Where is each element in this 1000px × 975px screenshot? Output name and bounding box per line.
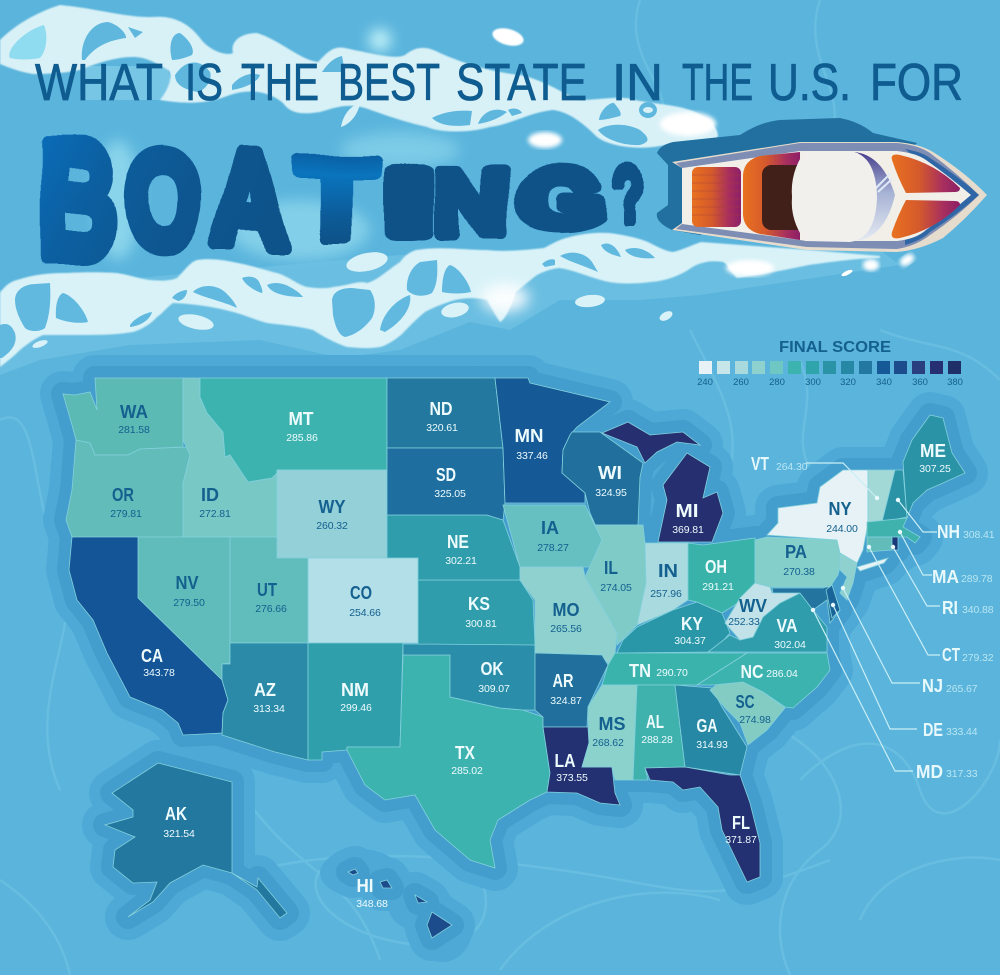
label: WV bbox=[728, 596, 767, 628]
label: ND: 320.61 bbox=[426, 422, 458, 434]
state: CA bbox=[69, 537, 228, 735]
label: MN: MN bbox=[514, 426, 544, 446]
foam wake: upper band bbox=[0, 5, 718, 148]
legend labels: 320 bbox=[840, 377, 856, 388]
label: ID bbox=[199, 485, 231, 520]
title word: BOATING?: T bbox=[298, 135, 376, 267]
label: ID: ID bbox=[201, 485, 219, 505]
state: IN bbox=[637, 543, 688, 625]
state: MN bbox=[495, 378, 610, 503]
label: AR: AR bbox=[552, 671, 574, 691]
foam wake: lower band bbox=[0, 233, 916, 367]
label: TX bbox=[451, 743, 483, 777]
label: OR: 279.81 bbox=[110, 508, 142, 520]
state: IA bbox=[503, 505, 602, 567]
label: AK: AK bbox=[165, 804, 187, 824]
label: AZ: AZ bbox=[254, 680, 276, 700]
legend labels: 260 bbox=[733, 377, 749, 388]
label: FL: FL bbox=[732, 813, 750, 833]
title word: BOATING? bbox=[40, 107, 643, 290]
label: CO bbox=[349, 583, 381, 619]
legend labels: 240 bbox=[697, 377, 713, 388]
label: MN bbox=[514, 426, 548, 462]
label: WI: WI bbox=[598, 463, 622, 483]
label: MS: 268.62 bbox=[592, 737, 624, 749]
state: SC bbox=[710, 682, 785, 745]
label: NY: NY bbox=[828, 499, 852, 519]
legend labels bbox=[697, 377, 963, 388]
label: NY: 244.00 bbox=[826, 523, 858, 535]
label: SC: 274.98 bbox=[739, 714, 771, 726]
label: UT bbox=[255, 580, 287, 615]
label: SD bbox=[434, 465, 466, 500]
callout: CT bbox=[867, 545, 994, 665]
label: TN: 290.70 bbox=[656, 667, 688, 679]
label: IA: IA bbox=[541, 518, 559, 538]
label: KY bbox=[674, 614, 706, 647]
label: ND: ND bbox=[430, 399, 452, 419]
label: GA: GA bbox=[696, 716, 718, 736]
state: FL bbox=[645, 767, 760, 882]
label: SD: SD bbox=[436, 465, 456, 485]
map halo inner bbox=[63, 378, 965, 938]
label: NM bbox=[340, 680, 372, 714]
callout: MD: 317.33 bbox=[946, 768, 978, 780]
callout: MA bbox=[898, 530, 993, 587]
label: AZ bbox=[253, 680, 285, 715]
state: AZ bbox=[222, 643, 308, 760]
label: FL bbox=[725, 813, 757, 846]
label: PA: 270.38 bbox=[783, 566, 815, 578]
label: WA: WA bbox=[120, 402, 148, 422]
label: OR bbox=[110, 485, 142, 520]
label: MO: 265.56 bbox=[550, 623, 582, 635]
state: WY bbox=[277, 470, 387, 558]
title line: IN bbox=[612, 54, 663, 112]
state: WV bbox=[725, 583, 800, 640]
title word: BOATING?: B bbox=[40, 107, 116, 290]
state: IL bbox=[585, 513, 646, 645]
legend swatches bbox=[699, 361, 961, 374]
label: MT: MT bbox=[288, 409, 314, 429]
label: AL: 288.28 bbox=[641, 734, 673, 746]
label: AL bbox=[641, 712, 673, 746]
title line: WHAT bbox=[35, 54, 163, 112]
label: MT: 285.86 bbox=[286, 432, 318, 444]
state: CO bbox=[308, 558, 418, 643]
legend labels: 380 bbox=[947, 377, 963, 388]
state: TN bbox=[602, 653, 747, 685]
state: WA bbox=[63, 378, 183, 455]
state: UT bbox=[230, 537, 308, 643]
label: NM: 299.46 bbox=[340, 702, 372, 714]
label: SD: 325.05 bbox=[434, 488, 466, 500]
state: HI Kauai bbox=[348, 869, 358, 875]
label: WY bbox=[316, 497, 348, 532]
state: OH bbox=[688, 538, 755, 613]
label: WA bbox=[118, 402, 150, 436]
callout: RI: RI bbox=[942, 598, 958, 618]
state: NV bbox=[138, 537, 230, 680]
label: PA bbox=[783, 542, 815, 578]
state: SD bbox=[387, 448, 505, 520]
state: MT bbox=[200, 378, 387, 482]
label: VA: 302.04 bbox=[774, 639, 806, 651]
label: SC bbox=[736, 692, 771, 726]
lighter water beneath lower foam bbox=[0, 250, 900, 375]
label: NV: NV bbox=[176, 573, 198, 593]
callout: DE: 333.44 bbox=[946, 726, 978, 738]
state: MO bbox=[520, 567, 617, 665]
label: CA: 343.78 bbox=[143, 667, 175, 679]
label: TX: 285.02 bbox=[451, 765, 483, 777]
label: NC: 286.04 bbox=[766, 668, 798, 680]
state: HI Maui bbox=[415, 895, 427, 903]
state: HI Oahu bbox=[380, 880, 392, 888]
state: NJ bbox=[840, 553, 857, 600]
callout: VT: 264.30 bbox=[776, 461, 808, 473]
label: ME bbox=[919, 441, 951, 475]
label: OH: 291.21 bbox=[702, 581, 734, 593]
callout: NJ: 265.67 bbox=[946, 683, 978, 695]
state: DE bbox=[826, 585, 840, 618]
title line: IS bbox=[185, 54, 223, 112]
state: Long Island bbox=[857, 558, 888, 571]
callout: MD bbox=[811, 608, 978, 782]
title word: BOATING?: ? bbox=[613, 152, 643, 240]
callout: MA: MA bbox=[932, 567, 959, 587]
label: AZ: 313.34 bbox=[253, 703, 285, 715]
label: MT bbox=[286, 409, 318, 444]
label: OK: OK bbox=[480, 659, 504, 679]
legend: final score bbox=[697, 339, 963, 388]
label: KY: KY bbox=[681, 614, 703, 634]
legend labels: 280 bbox=[769, 377, 785, 388]
label: IL bbox=[600, 558, 632, 594]
label: NY bbox=[826, 499, 858, 535]
label: KS: 300.81 bbox=[465, 618, 497, 630]
callout: RI: 340.88 bbox=[962, 604, 994, 616]
state: NH bbox=[882, 470, 907, 522]
legend title: FINAL SCORE bbox=[779, 339, 891, 356]
label: LA bbox=[554, 751, 588, 784]
legend labels: 300 bbox=[805, 377, 821, 388]
callout: NJ: NJ bbox=[922, 676, 943, 696]
label: CO: 254.66 bbox=[349, 607, 381, 619]
label: OR: OR bbox=[112, 485, 134, 505]
label: NV: 279.50 bbox=[173, 597, 205, 609]
windshield bbox=[852, 152, 895, 241]
rear seat bbox=[692, 167, 741, 227]
label: AK: 321.54 bbox=[163, 828, 195, 840]
title line: THE bbox=[241, 54, 319, 112]
label: IN: IN bbox=[658, 561, 678, 581]
state: MI upper bbox=[602, 422, 700, 463]
label: MI: MI bbox=[676, 501, 698, 521]
legend labels: 340 bbox=[876, 377, 892, 388]
label: NE: 302.21 bbox=[445, 555, 477, 567]
label: CA bbox=[141, 646, 175, 679]
state: MD bbox=[772, 585, 840, 623]
legend labels: 360 bbox=[912, 377, 928, 388]
label: AK bbox=[163, 804, 195, 840]
title line: BEST bbox=[338, 54, 440, 112]
label: IL: IL bbox=[604, 558, 618, 578]
state: PA bbox=[755, 537, 843, 587]
state: RI bbox=[892, 537, 898, 550]
label: CO: CO bbox=[350, 583, 372, 603]
state: NM bbox=[308, 643, 403, 760]
label: HI: 348.68 bbox=[356, 898, 388, 910]
label: AR: 324.87 bbox=[550, 695, 582, 707]
state: CT bbox=[867, 537, 892, 552]
middle seat bbox=[743, 152, 800, 240]
label: MS bbox=[592, 714, 626, 749]
state: OR bbox=[66, 440, 190, 537]
foam islands bbox=[341, 103, 360, 127]
label: WY: 260.32 bbox=[316, 520, 348, 532]
label: PA: PA bbox=[785, 542, 807, 562]
state: VA bbox=[708, 593, 827, 652]
callout: NH: NH bbox=[937, 522, 960, 542]
title line bbox=[35, 54, 963, 112]
label: IA bbox=[537, 518, 569, 554]
state: TX bbox=[347, 655, 550, 868]
state: MA bbox=[867, 518, 920, 543]
middle seat well bbox=[762, 165, 800, 230]
state: ID bbox=[183, 378, 277, 537]
label: UT: 276.66 bbox=[255, 603, 287, 615]
callout: MA: 289.78 bbox=[961, 573, 993, 585]
label: SC: SC bbox=[736, 692, 754, 712]
label: NC: NC bbox=[740, 662, 764, 682]
state: AR bbox=[535, 653, 608, 727]
label: MI: 369.81 bbox=[672, 524, 704, 536]
label: ID: 272.81 bbox=[199, 508, 231, 520]
label: TN bbox=[629, 661, 688, 681]
label: NM: NM bbox=[341, 680, 369, 700]
label: IL: 274.05 bbox=[600, 582, 632, 594]
label: IA: 278.27 bbox=[537, 542, 569, 554]
label: IN bbox=[650, 561, 682, 600]
state: LA bbox=[543, 727, 620, 805]
label: LA: LA bbox=[554, 751, 576, 771]
title line: STATE bbox=[456, 54, 587, 112]
label: UT: UT bbox=[257, 580, 277, 600]
glow behind title word bbox=[96, 132, 460, 260]
title word: BOATING?: G bbox=[518, 155, 603, 243]
label: ME: ME bbox=[920, 441, 946, 461]
callout: CT: CT bbox=[942, 645, 960, 665]
callout: MD: MD bbox=[916, 762, 943, 782]
callout: CT: 279.32 bbox=[962, 652, 994, 664]
callout: VT: VT bbox=[751, 454, 769, 474]
label: MO bbox=[550, 600, 582, 635]
label: WI bbox=[595, 463, 627, 499]
state: NY bbox=[767, 470, 868, 563]
label: OK bbox=[478, 659, 510, 695]
label: MN: 337.46 bbox=[516, 450, 548, 462]
label: NE bbox=[445, 532, 477, 567]
label: MI bbox=[672, 501, 704, 536]
label: OH: OH bbox=[705, 557, 727, 577]
label: AL: AL bbox=[646, 712, 664, 732]
label: GA bbox=[696, 716, 728, 751]
label: FL: 371.87 bbox=[725, 834, 757, 846]
state: AL bbox=[633, 685, 685, 780]
title word: BOATING?: N bbox=[435, 149, 509, 254]
title word: BOATING?: I bbox=[383, 149, 435, 254]
callout: DE bbox=[831, 603, 978, 740]
state: HI big island bbox=[427, 912, 452, 938]
state: GA bbox=[675, 685, 747, 775]
front seat top bbox=[892, 155, 960, 193]
label: KS: KS bbox=[468, 594, 490, 614]
callout: NH bbox=[896, 498, 995, 542]
title line: THE bbox=[682, 54, 753, 112]
state: ME bbox=[903, 415, 965, 518]
label: NE: NE bbox=[447, 532, 469, 552]
state: WI bbox=[562, 432, 643, 525]
state: NC bbox=[697, 653, 830, 708]
label: TN: TN bbox=[629, 661, 651, 681]
state: KS bbox=[418, 580, 535, 645]
label: WV: WV bbox=[739, 596, 767, 616]
cabin roof bbox=[792, 151, 877, 242]
label: WV: 252.33 bbox=[728, 616, 760, 628]
title line: FOR bbox=[870, 54, 963, 112]
label: OH bbox=[702, 557, 734, 593]
label: ND bbox=[426, 399, 458, 434]
label: ME: 307.25 bbox=[919, 463, 951, 475]
glow spots bbox=[481, 251, 916, 312]
state: OK bbox=[403, 644, 535, 710]
state labels bbox=[110, 399, 951, 910]
label: NC bbox=[740, 662, 798, 682]
title word: BOATING?: O bbox=[125, 121, 201, 278]
state: ND bbox=[387, 378, 503, 448]
label: LA: 373.55 bbox=[556, 772, 588, 784]
label: VA: VA bbox=[776, 616, 798, 636]
foam islands bbox=[31, 249, 674, 350]
label: CA: CA bbox=[141, 646, 163, 666]
callout: RI bbox=[891, 545, 994, 618]
title word: BOATING?: A bbox=[212, 126, 288, 273]
state: AK bbox=[105, 763, 287, 918]
label: VA bbox=[774, 616, 806, 651]
label: NV bbox=[173, 573, 205, 609]
state: MI lower bbox=[658, 453, 723, 542]
state: KY bbox=[617, 602, 730, 653]
state: NE bbox=[387, 515, 520, 580]
title line: U.S. bbox=[768, 54, 851, 112]
callout: NJ bbox=[841, 586, 978, 696]
label: MO: MO bbox=[552, 600, 580, 620]
label: HI: HI bbox=[356, 876, 374, 896]
label: IN: 257.96 bbox=[650, 588, 682, 600]
map halo bbox=[63, 378, 965, 962]
callout: VT bbox=[751, 454, 879, 500]
state: VT bbox=[868, 470, 895, 522]
label: KS bbox=[465, 594, 497, 630]
callout: NH: 308.41 bbox=[963, 529, 995, 541]
icon: boat bbox=[657, 118, 987, 252]
callouts: small northeast states bbox=[751, 454, 995, 782]
label: TX: TX bbox=[455, 743, 475, 763]
state: MS bbox=[582, 685, 637, 780]
label: HI bbox=[356, 876, 388, 910]
map: states bbox=[63, 378, 965, 938]
label: GA: 314.93 bbox=[696, 739, 728, 751]
callout: DE: DE bbox=[923, 720, 943, 740]
front seat bottom bbox=[892, 200, 960, 238]
label: WA: 281.58 bbox=[118, 424, 150, 436]
glow spots bbox=[369, 25, 716, 148]
label: OK: 309.07 bbox=[478, 683, 510, 695]
label: AR bbox=[550, 671, 582, 707]
label: WY: WY bbox=[318, 497, 346, 517]
label: KY: 304.37 bbox=[674, 635, 706, 647]
label: WI: 324.95 bbox=[595, 487, 627, 499]
label: MS: MS bbox=[598, 714, 626, 734]
